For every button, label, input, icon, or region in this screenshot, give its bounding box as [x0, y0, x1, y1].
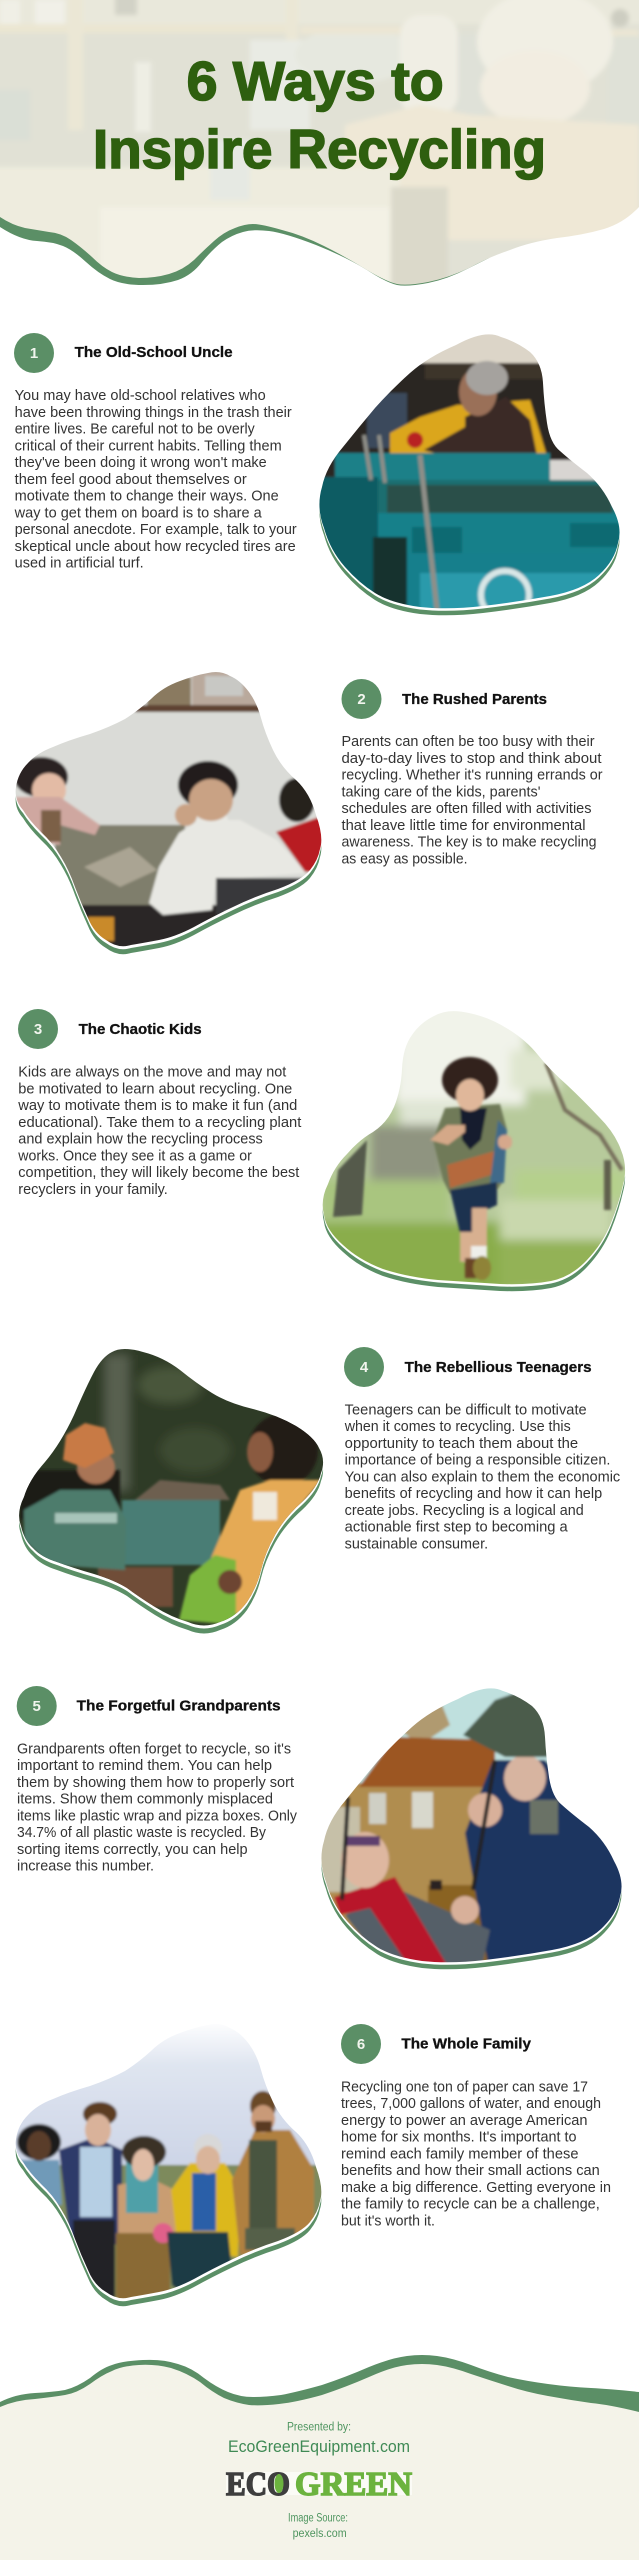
body text 5: 34.7% of all plastic waste is recycled. By [17, 1825, 267, 1841]
photo blob: grandparents on a swing [321, 1688, 622, 1970]
body text 4 [344, 1402, 620, 1552]
photo blob: man at recycling bins [319, 334, 620, 616]
body text 3: educational). Take them to a recycling plant [18, 1115, 301, 1131]
heading: the whole family: The Whole Family [401, 2036, 532, 2053]
number badge 3: 3 [34, 1021, 42, 1038]
number badge 2: 2 [357, 691, 366, 708]
body text 5 [17, 1741, 298, 1874]
body text 6: remind each family member of these [341, 2146, 579, 2162]
body text 3: Kids are always on the move and may not [18, 1065, 286, 1081]
photo blob: tired mother with children [10, 665, 330, 955]
wavy green band under header [0, 200, 489, 286]
body text 5: important to remind them. You can help [17, 1758, 272, 1774]
number badge 2 [342, 679, 382, 719]
body text 2: recycling. Whether it's running errands or [342, 768, 603, 784]
body text 4: You can also explain to them the economic [345, 1469, 620, 1485]
footer background [0, 2364, 639, 2560]
image source label: Image Source: [288, 2513, 348, 2525]
body text 5: items like plastic wrap and pizza boxes. Only [17, 1808, 298, 1824]
body text 6: benefits and how their small actions can [341, 2163, 600, 2179]
body text 1: they've been doing it wrong won't make [15, 455, 267, 471]
body text 6: Recycling one ton of paper can save 17 [341, 2079, 588, 2095]
wavy green band [0, 2355, 639, 2560]
panel: section 2 the rushed parents [10, 665, 603, 955]
body text 4: opportunity to teach them about the [345, 1436, 578, 1452]
number badge 6 [341, 2024, 381, 2064]
number badge 1 [14, 333, 54, 373]
logo: eco green: GREEN [295, 2466, 412, 2503]
body text 4: when it comes to recycling. Use this [344, 1419, 571, 1435]
body text 3 [17, 1065, 301, 1198]
website: EcoGreenEquipment.com [228, 2438, 410, 2456]
body text 2: taking care of the kids, parents' [342, 784, 541, 800]
body text 6: make a big difference. Getting everyone in [341, 2180, 611, 2196]
body text 6: the family to recycle can be a challenge, [341, 2196, 600, 2212]
body text 3: and explain how the recycling process [18, 1132, 263, 1148]
body text 1: them feel good about themselves or [15, 472, 247, 488]
body text 2: schedules are often filled with activities [342, 801, 592, 817]
panel: section 4 the rebellious teenagers [10, 1340, 620, 1635]
title: Inspire Recycling [93, 118, 546, 180]
heading: the forgetful grandparents: The Forgetful Grandparents [77, 1698, 281, 1715]
body text 4: benefits of recycling and how it can help [345, 1486, 602, 1502]
body text 3: way to motivate them is to make it fun (and [17, 1098, 297, 1114]
body text 5: sorting items correctly, you can help [17, 1842, 248, 1858]
body text 5: Grandparents often forget to recycle, so it's [17, 1741, 291, 1757]
body text 2: day-to-day lives to stop and think about [342, 751, 602, 767]
photo blob: child running through grass [315, 1000, 635, 1295]
body text 5: items. Show them commonly misplaced [17, 1792, 273, 1808]
body text 1: way to get them on board is to share a [14, 505, 262, 521]
title [93, 50, 546, 180]
number badge 4 [344, 1347, 384, 1387]
panel: section 5 the forgetful grandparents [17, 1680, 635, 1975]
body text 1: have been throwing things in the trash their [15, 405, 292, 421]
body text 6: but it's worth it. [341, 2213, 435, 2229]
number badge 6: 6 [357, 2036, 365, 2053]
body text 1: skeptical uncle about how recycled tires are [15, 539, 296, 555]
body text 4: create jobs. Recycling is a logical and [345, 1503, 584, 1519]
body text 2: that leave little time for environmental [342, 818, 586, 834]
body text 1: personal anecdote. For example, talk to your [15, 522, 297, 538]
body text 3: works. Once they see it as a game or [17, 1148, 252, 1164]
body text 2: as easy as possible. [342, 851, 468, 867]
body text 4: importance of being a responsible citizen. [345, 1452, 610, 1468]
panel: section 6 the whole family [10, 2020, 611, 2315]
logo: eco green [226, 2466, 412, 2503]
image source value: pexels.com [293, 2528, 347, 2540]
body text 1: entire lives. Be careful not to be overly [15, 422, 256, 438]
panel: section 3 the chaotic kids [17, 1000, 635, 1295]
body text 5: increase this number. [17, 1858, 154, 1874]
body text 3: be motivated to learn about recycling. One [18, 1082, 292, 1098]
heading: the rushed parents: The Rushed Parents [402, 691, 547, 708]
header background photo: child sorting bottles [0, 0, 639, 300]
body text 4: sustainable consumer. [345, 1536, 488, 1552]
body text 4: Teenagers can be difficult to motivate [345, 1402, 587, 1418]
body text 2: Parents can often be too busy with their [342, 734, 595, 750]
body text 1: motivate them to change their ways. One [15, 488, 279, 504]
number badge 5: 5 [33, 1698, 41, 1715]
body text 1: critical of their current habits. Telling them [15, 438, 282, 454]
title: 6 Ways to [187, 50, 444, 112]
panel: header [0, 0, 639, 300]
number badge 3 [18, 1009, 58, 1049]
body text 1 [14, 388, 297, 572]
logo: eco green: ECO [226, 2466, 290, 2503]
body text 6 [341, 2079, 611, 2229]
body text 3: recyclers in your family. [18, 1182, 168, 1198]
body text 2: awareness. The key is to make recycling [342, 834, 597, 850]
body text 1: You may have old-school relatives who [15, 388, 266, 404]
heading: the chaotic kids: The Chaotic Kids [79, 1021, 202, 1038]
body text 6: energy to power an average American [341, 2113, 588, 2129]
body text 6: home for six months. It's important to [341, 2130, 577, 2146]
photo blob: two women talking outdoors [10, 1340, 335, 1635]
body text 4: actionable first step to becoming a [345, 1520, 568, 1536]
body text 2 [342, 734, 603, 867]
panel: footer [0, 2355, 639, 2560]
body text 1: used in artificial turf. [15, 556, 144, 572]
photo blob: five people cleaning up outdoors [16, 2032, 322, 2306]
number badge 1: 1 [30, 345, 38, 362]
number badge 5 [17, 1686, 57, 1726]
body text 6: trees, 7,000 gallons of water, and enough [341, 2096, 601, 2112]
body text 5: them by showing them how to properly sort [17, 1775, 294, 1791]
number badge 4: 4 [360, 1359, 369, 1376]
body text 3: competition, they will likely become the best [18, 1165, 299, 1181]
heading: the old-school uncle: The Old-School Uncle [75, 344, 233, 361]
panel: section 1 the old-school uncle [14, 325, 630, 625]
presented by label: Presented by: [287, 2422, 351, 2434]
heading: the rebellious teenagers: The Rebellious Teenagers [405, 1359, 592, 1376]
